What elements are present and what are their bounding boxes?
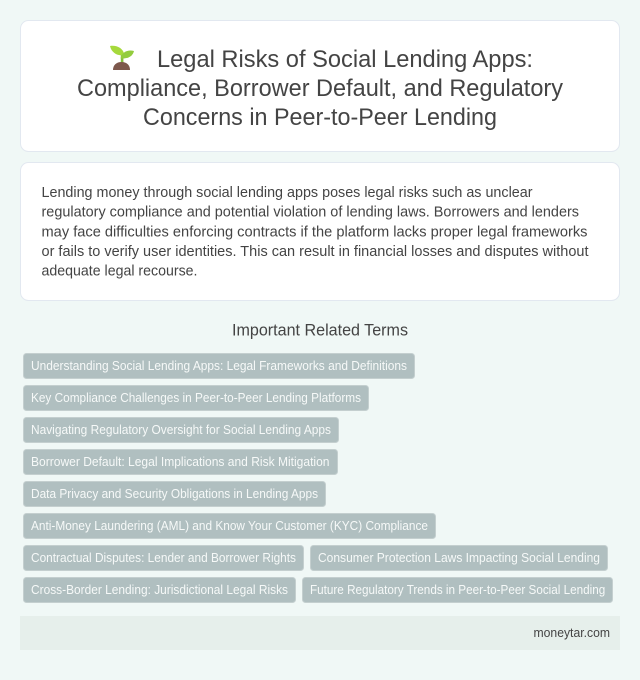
tag: borrower default [24,450,338,474]
title: Concerns in Peer-to-Peer Lending [143,104,497,131]
tag: data privacy: Data Privacy and Security Obligations in Lending Apps [31,486,318,501]
title: Compliance, Borrower Default, and Regulatory [77,75,564,102]
tag: understanding social lending apps [24,354,414,378]
tag: consumer protection laws [310,546,608,570]
title: Legal Risks of Social Lending Apps: [157,46,533,73]
tag: cross-border lending [24,578,296,602]
description text: regulatory compliance and potential violation of lending laws. Borrowers and lenders [42,205,579,221]
tag: understanding social lending apps: Understanding Social Lending Apps: Legal Frameworks and Definitions [31,358,407,373]
tag: future regulatory trends [302,578,612,602]
tag: consumer protection laws: Consumer Protection Laws Impacting Social Lending [318,550,600,565]
title [77,46,564,131]
description text [42,185,588,279]
tag: borrower default: Borrower Default: Legal Implications and Risk Mitigation [31,454,330,469]
tag: contractual disputes [24,546,304,570]
description text: may face difficulties enforcing contracts if the platform lacks proper legal frameworks [42,224,588,240]
footer bar [20,616,620,650]
tag: aml and kyc [24,514,436,538]
tag list [24,354,612,602]
description text: adequate legal recourse. [42,263,198,279]
tag: key compliance challenges [24,386,368,410]
footer source text: moneytar.com [534,625,610,640]
description text: or fails to verify user identities. This can result in financial losses and disputes without [42,244,588,260]
panel: title card [20,20,620,152]
heading: important related terms: Important Related Terms [232,322,408,340]
icon: seedling [110,46,134,70]
tag: contractual disputes: Contractual Disputes: Lender and Borrower Rights [31,550,296,565]
tag: aml and kyc: Anti-Money Laundering (AML) and Know Your Customer (KYC) Compliance [31,518,428,533]
description text: Lending money through social lending apps poses legal risks such as unclear [42,185,533,201]
tag: data privacy [24,482,326,506]
tag: cross-border lending: Cross-Border Lending: Jurisdictional Legal Risks [31,582,288,597]
tag: key compliance challenges: Key Compliance Challenges in Peer-to-Peer Lending Platforms [31,390,361,405]
tag: future regulatory trends: Future Regulatory Trends in Peer-to-Peer Social Lending [310,582,605,597]
tag: navigating regulatory oversight [24,418,338,442]
panel: description card [20,162,620,300]
tag: navigating regulatory oversight: Navigating Regulatory Oversight for Social Lending Apps [31,422,331,437]
